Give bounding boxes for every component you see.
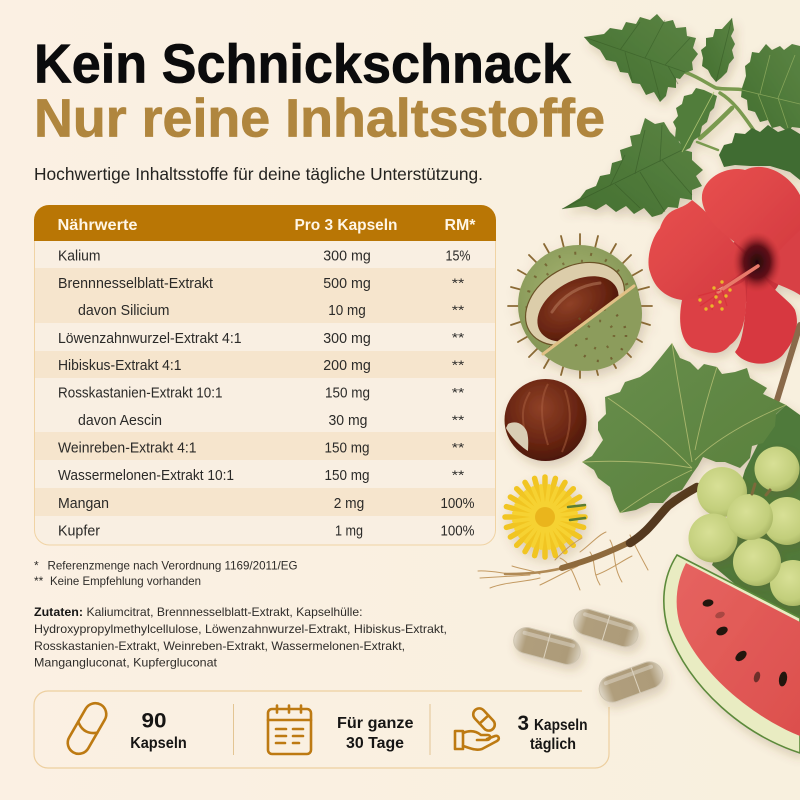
row: Mangan: Mangan: [58, 496, 109, 512]
row: davon Silicium: [78, 303, 464, 319]
spikes: [508, 234, 652, 378]
row: Kalium: [58, 248, 471, 264]
info panel: [34, 691, 609, 768]
petal base: [718, 238, 782, 302]
row: davon Aescin: 30 mg: [328, 413, 368, 429]
icon: hand with capsule: [455, 706, 499, 750]
illustration: nettle sprig: [562, 14, 800, 217]
flower throat: [733, 232, 781, 292]
nettle leaf: top small: [701, 18, 735, 82]
illustration: chestnut: [504, 379, 586, 461]
row: Brennnesselblatt-Extrakt: [58, 276, 464, 292]
row: Hibiskus-Extrakt: Hibiskus-Extrakt 4:1: [58, 358, 182, 374]
row: Hibiskus-Extrakt: 200 mg: [323, 358, 371, 374]
illustration: watermelon: [664, 555, 800, 753]
row: Wassermelonen-Extrakt: 150 mg: [324, 468, 370, 484]
stat: 3 Kapseln täglich: [518, 712, 588, 753]
illustration: chestnut burr: [508, 234, 652, 378]
main leaf: [582, 343, 786, 513]
footnotes: *: [34, 558, 39, 572]
row: Mangan: [58, 496, 475, 512]
subtitle: Hochwertige Inhaltsstoffe für deine tägliche Unterstützung.: [34, 164, 483, 184]
footnotes: **: [34, 574, 44, 588]
row: Rosskastanien-Extrakt: **: [452, 386, 464, 400]
row: Kupfer: [58, 524, 475, 540]
burr husk: [518, 245, 640, 365]
stat: 3 Kapseln täglich: Kapseln: [534, 717, 588, 734]
illustration: vine leaf: [582, 343, 800, 625]
stat: Für ganze 30 Tage: [337, 715, 414, 752]
row: Löwenzahnwurzel-Extrakt: Löwenzahnwurzel-Extrakt 4:1: [58, 331, 242, 347]
capsule 2: [571, 606, 641, 650]
lower husk: [543, 286, 642, 371]
illustration: vine stem: [777, 325, 800, 400]
capsule 1: [511, 625, 583, 667]
title line 1: Kein Schnickschnack: [34, 32, 571, 94]
petal: bottom right: [735, 270, 797, 364]
footnotes: [34, 558, 298, 588]
stat: 3 Kapseln täglich: 3: [518, 712, 529, 735]
row: Weinreben-Extrakt: [58, 440, 464, 456]
stat: 90 Kapseln: [130, 710, 187, 752]
chestnut seed: [526, 263, 630, 355]
nutrition table: [34, 205, 496, 545]
row: Wassermelonen-Extrakt: **: [452, 468, 464, 482]
petal: top: [702, 167, 800, 264]
petal: bottom left: [680, 280, 746, 353]
ingredients text: Zutaten:: [34, 605, 83, 619]
row: Kupfer: 1 mg: [335, 524, 363, 540]
row: Löwenzahnwurzel-Extrakt: **: [452, 331, 464, 345]
table header: Nährwerte: [58, 217, 138, 234]
seeds: [702, 599, 788, 687]
row: Rosskastanien-Extrakt: 150 mg: [325, 386, 370, 402]
row: Brennnesselblatt-Extrakt: **: [452, 276, 464, 290]
stat: Für ganze 30 Tage: Für ganze: [337, 715, 414, 732]
row: Weinreben-Extrakt: 150 mg: [324, 440, 370, 456]
ingredients text: [34, 605, 447, 670]
flesh: [677, 563, 800, 736]
icon: calendar: [268, 706, 311, 754]
stat: Für ganze 30 Tage: 30 Tage: [346, 735, 404, 752]
row: davon Silicium: davon Silicium: [78, 303, 170, 319]
icon: capsule: [64, 699, 110, 758]
row: Hibiskus-Extrakt: [58, 358, 464, 374]
row: davon Aescin: **: [452, 414, 464, 428]
row: davon Aescin: davon Aescin: [78, 413, 162, 429]
row: Mangan: 2 mg: [334, 496, 364, 512]
ingredients text: Mangangluconat, Kupfergluconat: [34, 656, 218, 670]
row: Löwenzahnwurzel-Extrakt: [58, 331, 464, 347]
row: Rosskastanien-Extrakt: Rosskastanien-Extrakt 10:1: [58, 386, 222, 402]
stat: 90 Kapseln: 90: [142, 710, 166, 732]
table header: [34, 205, 496, 241]
back leaf: [712, 405, 800, 625]
row: Hibiskus-Extrakt: **: [452, 358, 464, 372]
row: Mangan: 100%: [440, 496, 475, 512]
capsule 3: [595, 658, 667, 706]
table body: [34, 240, 496, 545]
row: Weinreben-Extrakt: **: [452, 441, 464, 455]
stat: 90 Kapseln: Kapseln: [130, 735, 187, 752]
inner shell: [511, 245, 639, 363]
title line 2: Nur reine Inhaltsstoffe: [34, 88, 605, 148]
rind: [664, 555, 800, 753]
row: Kalium: Kalium: [58, 248, 100, 264]
row: davon Silicium: **: [452, 304, 464, 318]
row: Kupfer: Kupfer: [58, 524, 100, 540]
petal: right: [760, 222, 800, 295]
ingredients text: Hydroxypropylmethylcellulose, Löwenzahnwurzel-Extrakt, Hibiskus-Extrakt,: [34, 622, 447, 636]
illustration: dandelion: [505, 477, 585, 557]
row: Kalium: 15%: [446, 248, 471, 264]
stems: [685, 72, 755, 150]
title: [34, 32, 605, 148]
row: davon Silicium: 10 mg: [328, 303, 366, 319]
panel frame: [34, 691, 609, 768]
stat: 3 Kapseln täglich: täglich: [530, 736, 576, 753]
footnotes: Referenzmenge nach Verordnung 1169/2011/EG: [48, 558, 298, 572]
row: Weinreben-Extrakt: Weinreben-Extrakt 4:1: [58, 440, 196, 456]
row: Kupfer: 100%: [440, 524, 475, 540]
petal: left: [648, 200, 752, 300]
row: Brennnesselblatt-Extrakt: Brennnesselblatt-Extrakt: [58, 276, 213, 292]
row: Wassermelonen-Extrakt: Wassermelonen-Extrakt 10:1: [58, 468, 234, 484]
nettle leaf: large lower: [562, 118, 703, 217]
illustration: capsules: [511, 606, 667, 706]
ingredients text: Kaliumcitrat, Brennnesselblatt-Extrakt, Kapselhülle:: [86, 605, 362, 619]
ingredients text: Rosskastanien-Extrakt, Weinreben-Extrakt, Wassermelonen-Extrakt,: [34, 639, 405, 653]
row: Wassermelonen-Extrakt: [58, 468, 464, 484]
row: Kalium: 300 mg: [323, 248, 371, 264]
nettle leaf: centre: [673, 88, 717, 152]
row: Brennnesselblatt-Extrakt: 500 mg: [323, 276, 371, 292]
illustration: hibiscus flower: [648, 167, 800, 364]
illustration: dandelion root: [478, 487, 697, 590]
illustration: grapes: [688, 446, 800, 606]
row: Löwenzahnwurzel-Extrakt: 300 mg: [323, 331, 371, 347]
nettle leaf: lower right: [719, 125, 800, 180]
table header: RM*: [444, 217, 476, 234]
row: davon Aescin: [78, 413, 464, 429]
nettle leaf: top left: [584, 14, 698, 102]
nettle leaf: right: [741, 44, 800, 132]
stamen: [698, 266, 758, 311]
table header: Pro 3 Kapseln: [294, 217, 398, 234]
footnotes: Keine Empfehlung vorhanden: [50, 574, 201, 588]
row: Rosskastanien-Extrakt: [58, 386, 464, 402]
